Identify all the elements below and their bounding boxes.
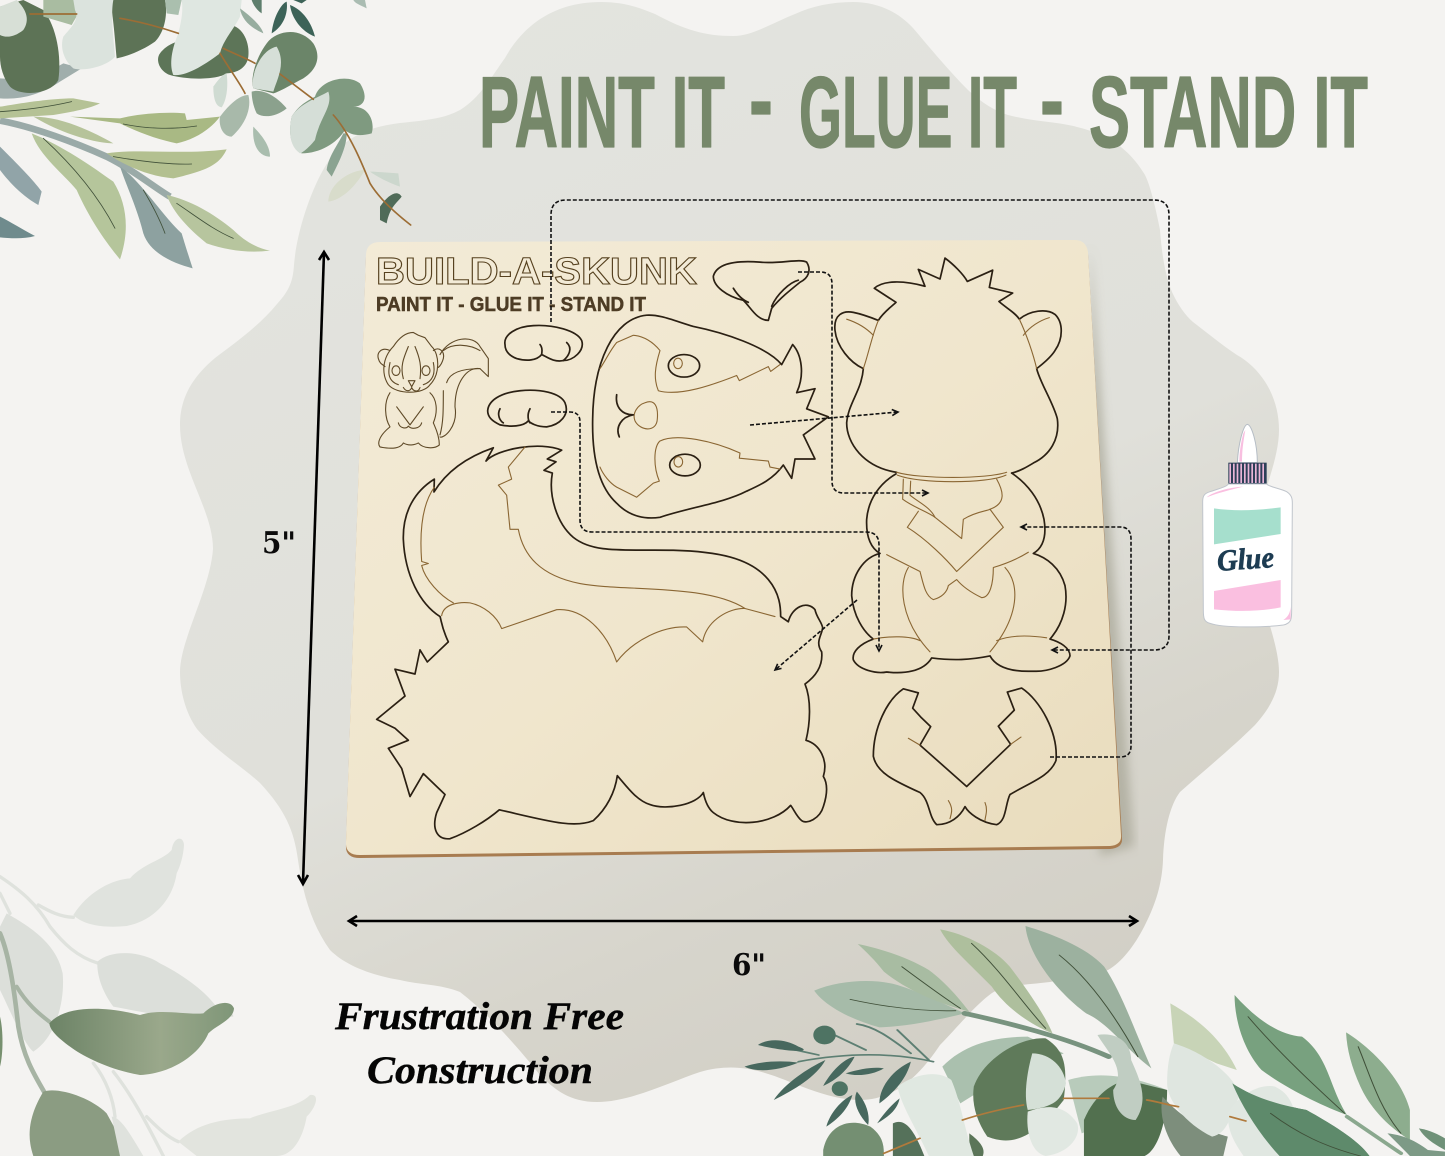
dimension label: 5 inches: 5" bbox=[262, 526, 296, 561]
icon: glue bottle: Glue bbox=[1216, 541, 1275, 578]
title: PAINT IT bbox=[479, 57, 725, 169]
caption: Construction bbox=[367, 1049, 593, 1092]
title: - bbox=[749, 44, 773, 156]
foot piece: small top bbox=[713, 261, 809, 320]
skunk head piece bbox=[835, 258, 1061, 482]
title: GLUE IT bbox=[799, 57, 1017, 169]
icon: glue bottle bbox=[1203, 424, 1292, 627]
caption bbox=[334, 995, 624, 1092]
skunk body piece bbox=[852, 473, 1070, 673]
paw piece two bbox=[488, 390, 566, 427]
mini skunk illustration bbox=[378, 332, 488, 448]
title: - bbox=[1040, 44, 1064, 156]
tail and back piece bbox=[377, 446, 826, 839]
arms piece bbox=[873, 688, 1056, 825]
dimension arrow: height bbox=[298, 252, 329, 884]
dimension label: 6 inches: 6" bbox=[732, 948, 766, 983]
title bbox=[479, 44, 1368, 169]
caption: Frustration Free bbox=[334, 995, 624, 1038]
dashed assembly arrows bbox=[551, 200, 1169, 757]
board subheading: PAINT IT - GLUE IT - STAND IT bbox=[376, 294, 646, 316]
wooden board bbox=[346, 240, 1134, 858]
board heading: BUILD-A-SKUNK: BUILD-A-SKUNK bbox=[376, 251, 698, 293]
paw piece one bbox=[505, 325, 582, 361]
dimension arrow: width bbox=[349, 916, 1137, 926]
face piece bbox=[593, 315, 828, 518]
foliage: top left eucalyptus and willow leaves bbox=[0, 0, 411, 268]
wavy backdrop shape bbox=[180, 2, 1279, 1102]
foliage: bottom left pale leaves bbox=[0, 839, 316, 1156]
engraved pieces, left half of board bbox=[377, 261, 828, 839]
engraved pieces, right half of board bbox=[835, 258, 1070, 825]
foliage: bottom right eucalyptus and sprig bbox=[744, 926, 1445, 1156]
